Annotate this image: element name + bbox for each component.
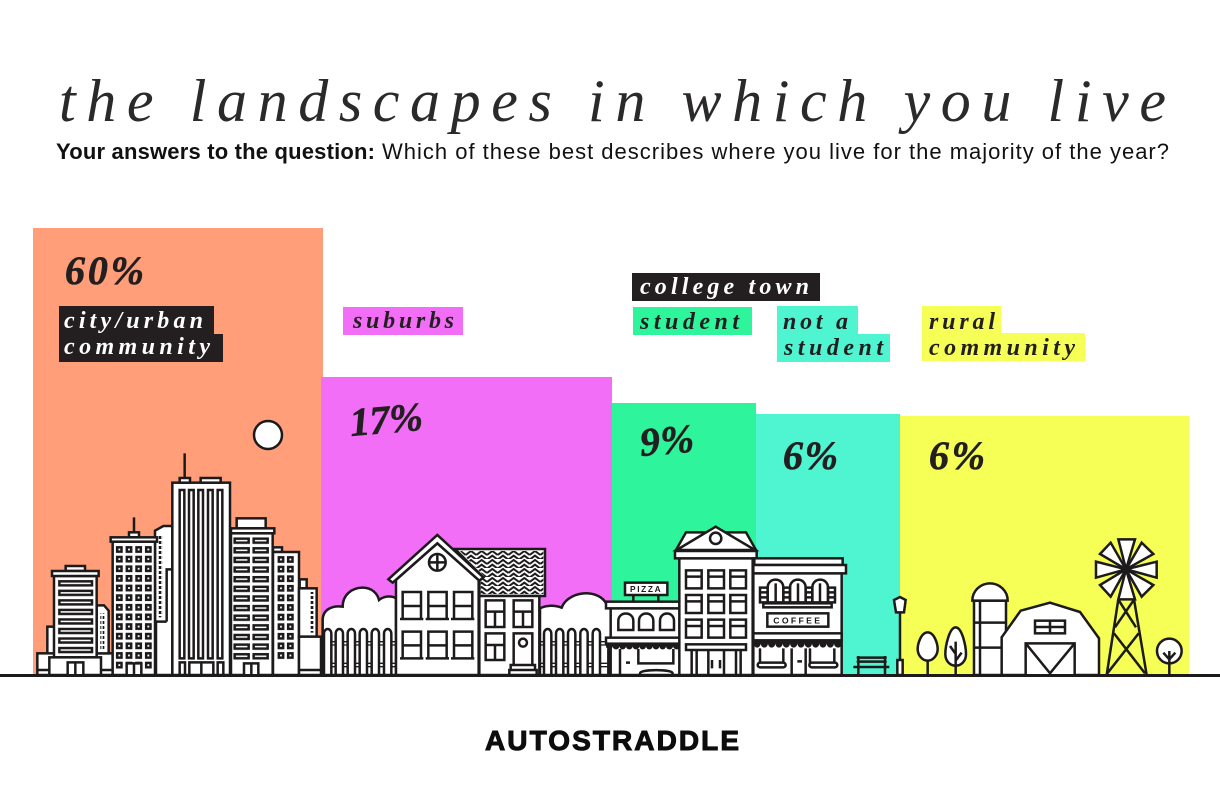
icon: tall tree: [945, 627, 966, 675]
bar: city 60%: [33, 228, 323, 675]
label: city/urban community: city/urban: [64, 308, 203, 334]
icon: park bench: [853, 656, 889, 675]
label: not a student: not a: [783, 309, 848, 335]
shop: tall centre building: [675, 527, 757, 675]
subtitle: Which of these best describes where you live for the majority of the year?: [382, 139, 1169, 164]
shop: coffee: COFFEE: [773, 615, 822, 625]
logo: Autostraddle: AUTOSTRADDLE: [485, 725, 739, 756]
value: 6% rural: 6%: [929, 433, 985, 478]
label: rural community: community: [929, 335, 1075, 361]
illustration: college town shops: [606, 527, 846, 675]
label: rural community: rural: [929, 309, 995, 335]
value: 17%: 17%: [348, 394, 425, 445]
illustration: rural farm: [918, 539, 1182, 675]
icon: tree: [918, 632, 938, 675]
icon: street lamp: [894, 597, 906, 675]
label: suburbs: suburbs: [352, 308, 454, 334]
bar: college town student 9%: [612, 403, 756, 675]
ground line: [0, 674, 1220, 677]
bar: college town not a student 6%: [756, 414, 900, 675]
icon: silo: [972, 583, 1008, 675]
title: the landscapes in which you live: [59, 68, 1166, 134]
icon: barn: [1002, 603, 1099, 675]
value: 60%: 60%: [65, 248, 144, 293]
label: city/urban community: community: [64, 334, 210, 360]
label: not a student: student: [783, 335, 884, 361]
shop: pizza: [606, 583, 680, 675]
label: rural community: [922, 306, 1085, 361]
illustration: city skyline: [37, 453, 321, 675]
icon: sun: [254, 421, 282, 449]
value: 6% not a student: 6%: [783, 433, 838, 478]
icon: windmill: [1096, 539, 1157, 675]
label: student: student: [639, 309, 740, 335]
illustration: suburban house with fence: [323, 535, 612, 675]
shop: coffee: [753, 558, 846, 675]
bar: suburbs 17%: [321, 377, 612, 675]
icon: round tree: [1157, 639, 1182, 675]
subtitle: Your answers to the question:: [56, 139, 375, 164]
label: college town: college town: [640, 274, 809, 300]
bar: rural 6%: [900, 416, 1189, 675]
value: 9%: 9%: [638, 415, 696, 465]
label: not a student: [777, 306, 890, 362]
shop: pizza: PIZZA: [630, 584, 662, 594]
label: city/urban community: [59, 306, 223, 362]
